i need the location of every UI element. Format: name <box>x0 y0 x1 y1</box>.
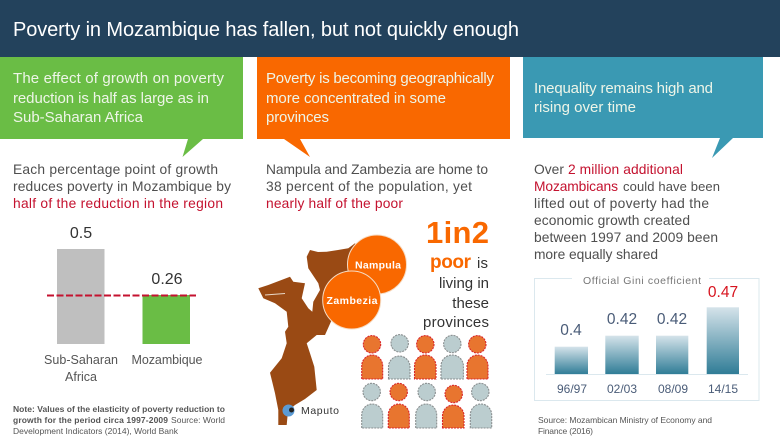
text: growth body: half of the reduction in the region <box>13 196 223 211</box>
callout: 1 in 2 poor <box>423 215 489 331</box>
circle: Nampula: Nampula <box>355 260 401 272</box>
bar chart: elasticity: Africa <box>65 370 97 384</box>
chart: Gini coefficient: 08/09 <box>658 382 688 396</box>
callout: 1 in 2 poor: living in <box>439 275 489 292</box>
callout: 1 in 2 poor: these <box>452 295 489 312</box>
text: inequality body: 2 million additional <box>568 162 683 177</box>
note: Gini source: Source: Mozambican Ministry of Economy and <box>538 415 712 425</box>
chart: Gini coefficient: 0.4 <box>560 322 582 339</box>
title: Poverty in Mozambique has fallen, but not quickly enough <box>13 19 519 41</box>
circle: Nampula <box>348 235 406 294</box>
bar chart: elasticity: 0.5 <box>70 225 92 242</box>
panel: geographic concentration callout: Poverty is becoming geographically <box>266 70 494 87</box>
map: Mozambique <box>258 235 406 425</box>
header bar <box>0 0 780 57</box>
text: growth body <box>13 162 231 211</box>
chart: Gini coefficient: 14/15 <box>708 382 738 396</box>
text: inequality body <box>534 162 720 262</box>
panel: inequality callout: rising over time <box>534 99 636 116</box>
note: chart source <box>13 404 225 436</box>
panel: inequality callout <box>523 57 763 158</box>
chart: Gini coefficient: 96/97 <box>557 382 587 396</box>
text: provinces body: 38 percent of the population, yet <box>266 179 472 194</box>
panel: geographic concentration callout <box>257 57 510 157</box>
panel: geographic concentration callout: provinces <box>266 109 329 126</box>
marker: Maputo: Maputo <box>301 405 339 417</box>
note: chart source: growth for the period circa 1997-2009 <box>13 415 168 425</box>
panel: growth effect callout: reduction is half as large as in <box>13 90 209 107</box>
text: inequality body: Over <box>534 162 564 177</box>
chart: Gini coefficient: 02/03 <box>607 382 637 396</box>
panel: growth effect callout <box>0 57 243 157</box>
chart: Gini coefficient <box>534 275 759 400</box>
text: inequality body: more equally shared <box>534 247 658 262</box>
panel: inequality callout: Inequality remains high and <box>534 80 713 97</box>
bar chart: elasticity: Mozambique <box>132 353 203 367</box>
circle: Zambezia <box>323 271 381 329</box>
callout: 1 in 2 poor: 1in2 <box>426 215 489 250</box>
text: inequality body: could have been <box>623 179 720 194</box>
chart: Gini coefficient: 0.42 <box>657 311 687 328</box>
note: Gini source: Finance (2016) <box>538 426 593 436</box>
note: chart source: Source: World <box>171 415 225 425</box>
text: inequality body: between 1997 and 2009 been <box>534 230 718 245</box>
marker: Maputo <box>282 404 339 417</box>
text: provinces body: Nampula and Zambezia are home to <box>266 162 488 177</box>
text: inequality body: lifted out of poverty had the <box>534 196 709 211</box>
panel: growth effect callout: Sub-Saharan Africa <box>13 109 144 126</box>
note: chart source: Development Indicators (2014), World Bank <box>13 426 179 436</box>
panel: geographic concentration callout: more concentrated in some <box>266 90 446 107</box>
chart: Gini coefficient: Official Gini coefficient <box>583 275 701 287</box>
text: inequality body: economic growth created <box>534 213 690 228</box>
text: inequality body: Mozambicans <box>534 179 618 194</box>
note: Gini source <box>538 415 712 436</box>
bar chart: elasticity: 0.26 <box>151 271 183 288</box>
note: chart source: Note: Values of the elasticity of poverty reduction to <box>13 404 225 414</box>
text: growth body: Each percentage point of growth <box>13 162 218 177</box>
callout: 1 in 2 poor: is <box>477 255 488 272</box>
text: provinces body <box>266 162 488 211</box>
chart: Gini coefficient: 0.42 <box>607 311 637 328</box>
bar chart: elasticity: Sub-Saharan <box>44 353 118 367</box>
panel: growth effect callout: The effect of growth on poverty <box>13 70 224 87</box>
bar chart: elasticity <box>44 225 203 384</box>
text: growth body: reduces poverty in Mozambique by <box>13 179 231 194</box>
text: provinces body: nearly half of the poor <box>266 196 403 211</box>
pictogram: people <box>362 335 492 428</box>
chart: Gini coefficient: 0.47 <box>708 284 738 301</box>
circle: Zambezia: Zambezia <box>326 295 378 307</box>
callout: 1 in 2 poor: provinces <box>423 314 489 331</box>
callout: 1 in 2 poor: poor <box>430 252 472 273</box>
